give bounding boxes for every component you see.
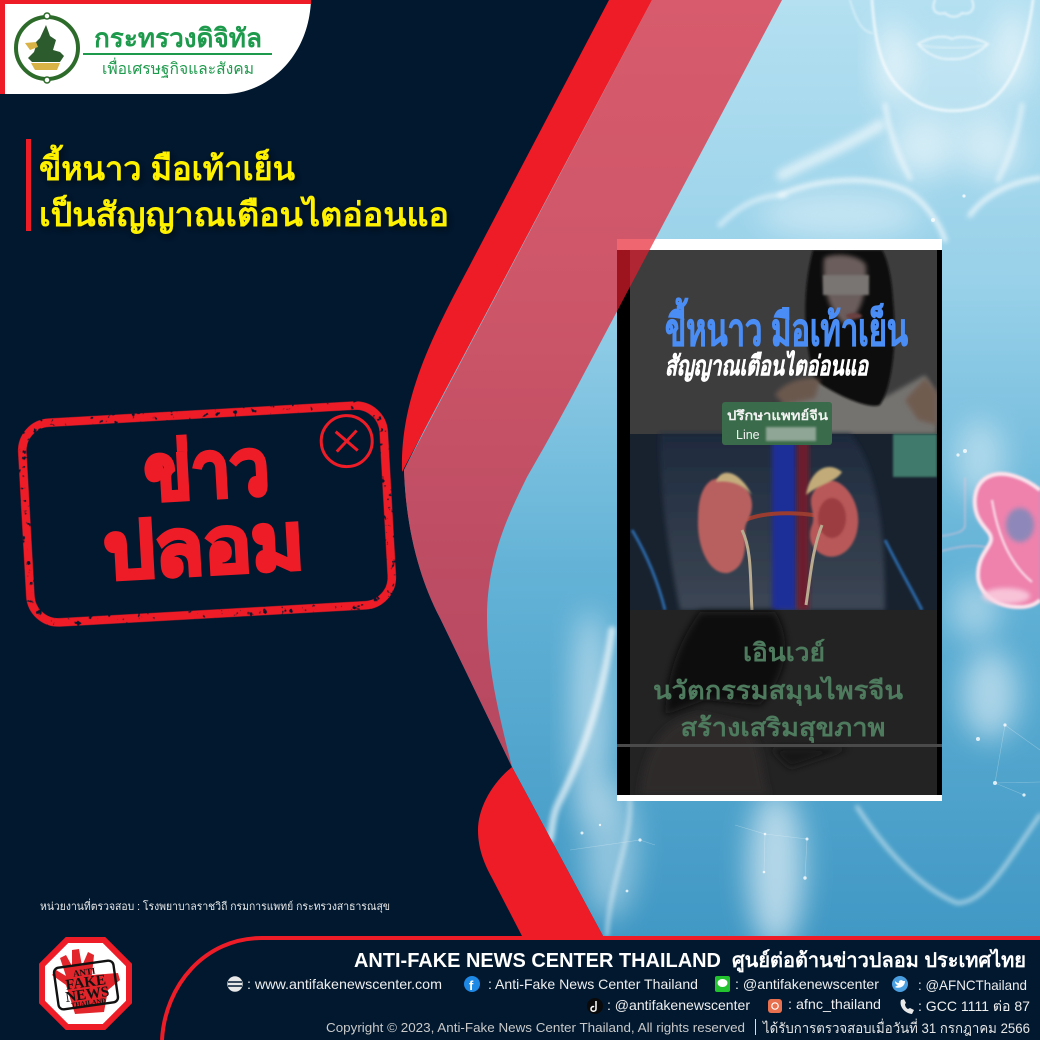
bottom photo: sick woman [630, 610, 937, 795]
panel: fake-news post screenshot [617, 239, 942, 801]
post black background [617, 250, 942, 795]
consult tag: Line [736, 428, 760, 442]
post brand text: เอินเวย์ [743, 638, 825, 667]
post headline: ขี้หนาว มือเท้าเย็น [665, 297, 908, 355]
icon: instagram [768, 999, 782, 1013]
post brand text: สร้างเสริมสุขภาพ [680, 714, 886, 744]
twitter handle: : @AFNCThailand [918, 977, 1027, 993]
title accent bar [26, 139, 31, 231]
logo octagon [42, 940, 129, 1027]
logo red edge [0, 0, 311, 94]
icon: ministry seal [16, 13, 78, 83]
logo badge: NEWS [64, 984, 110, 1006]
stamp text 2: ปลอม [102, 497, 306, 596]
background: light-blue body illustration [380, 0, 1040, 950]
post seek bar [617, 744, 942, 747]
logo badge: ANTI [72, 966, 97, 979]
icon: anti fake news logo [42, 940, 129, 1027]
website: : www.antifakenewscenter.com [247, 976, 442, 992]
ministry divider [83, 53, 272, 55]
consult tag: ปรึกษาแพทย์จีน [727, 408, 828, 423]
footer heading: ANTI-FAKE NEWS CENTER THAILAND ศูนย์ต่อต้านข่าวปลอม ประเทศไทย [354, 948, 1026, 974]
logo badge: THAILAND [71, 997, 107, 1009]
post subheadline: สัญญาณเตือนไตอ่อนแอ [665, 350, 869, 382]
stamp: fake news [21, 404, 393, 624]
translucent red swoosh band [404, 0, 782, 767]
icon: globe [228, 977, 242, 991]
header: ministry logo [0, 0, 311, 94]
line handle: : @antifakenewscenter [735, 976, 879, 992]
footer [162, 938, 1040, 1040]
footer red curve [162, 938, 1040, 1040]
source note: หน่วยงานที่ตรวจสอบ : โรงพยาบาลราชวิถี กรมการแพทย์ กระทรวงสาธารณสุข [40, 898, 390, 913]
middle photo: kidneys anatomy [630, 434, 937, 610]
stamp text: ข่าว [142, 423, 271, 517]
icon: line [715, 976, 730, 992]
title block [26, 139, 449, 234]
icon: pink kidney illustration [975, 474, 1040, 607]
logo badge: FAKE [65, 972, 107, 994]
consult tag [722, 402, 832, 445]
phone number: : GCC 1111 ต่อ 87 [918, 998, 1030, 1014]
logo badge [53, 960, 119, 1011]
copyright: Copyright © 2023, Anti-Fake News Center Thailand, All rights reserved [326, 1020, 745, 1035]
icon: facebook [464, 976, 480, 993]
logo white plate [0, 0, 311, 94]
ministry name: กระทรวงดิจิทัล [94, 23, 262, 53]
title line 2: เป็นสัญญาณเตือนไตอ่อนแอ [39, 194, 449, 234]
icon: phone [901, 999, 914, 1014]
icon: x circle [320, 414, 374, 468]
ministry subtitle: เพื่อเศรษฐกิจและสังคม [102, 57, 254, 78]
post images [630, 250, 937, 795]
red swoosh top [402, 0, 652, 472]
top photo: woman with cold hands [630, 250, 937, 434]
logo red hand [52, 949, 120, 1014]
facebook handle: : Anti-Fake News Center Thailand [488, 976, 698, 992]
footer separator [755, 1019, 756, 1035]
red swoosh bottom [478, 767, 603, 936]
title line 1: ขี้หนาว มือเท้าเย็น [39, 144, 295, 187]
icon: tiktok [587, 998, 603, 1014]
verified date: ได้รับการตรวจสอบเมื่อวันที่ 31 กรกฎาคม 2566 [762, 1019, 1030, 1036]
post brand text [653, 638, 903, 744]
stamp border [21, 404, 393, 624]
tiktok handle: : @antifakenewscenter [607, 997, 750, 1013]
post white frame [617, 239, 942, 801]
footer panel [162, 938, 1040, 1040]
post brand text: นวัตกรรมสมุนไพรจีน [653, 675, 903, 707]
icon: twitter [892, 976, 908, 992]
instagram handle: : afnc_thailand [788, 996, 881, 1012]
icon: facebook: f [469, 978, 474, 993]
